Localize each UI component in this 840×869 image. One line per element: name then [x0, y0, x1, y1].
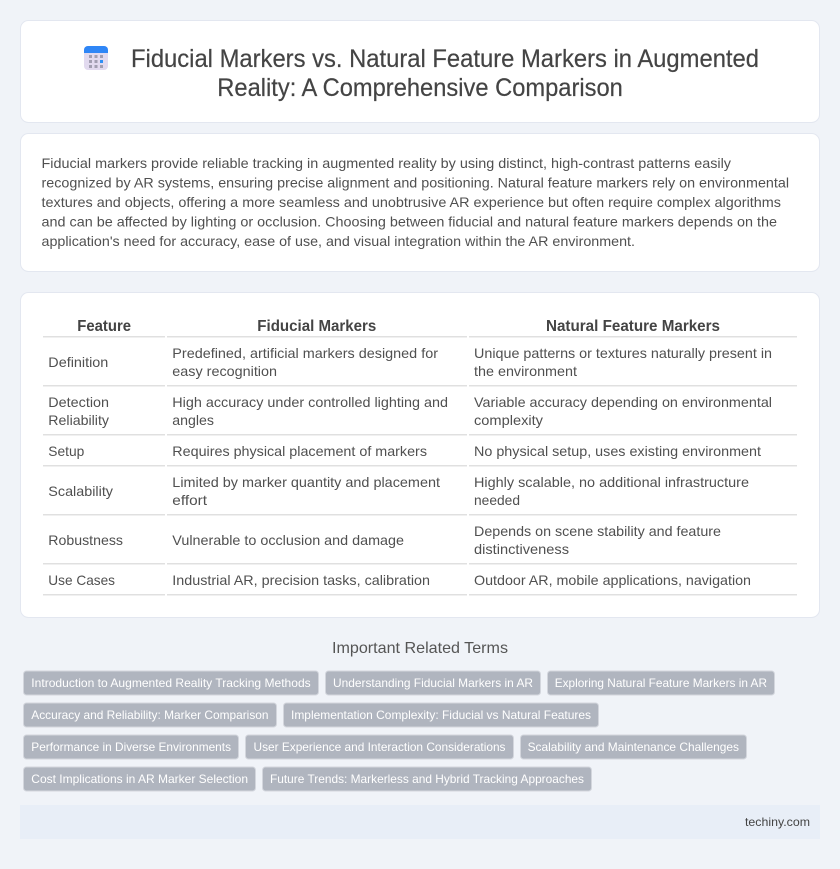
table row: scalability: Scalability: [48, 483, 113, 499]
text block: introduction: application's need for accuracy, ease of use, and visual integration within the AR environment.: [42, 233, 635, 249]
chip row 1: Introduction to Augmented Reality Tracking Methods: [31, 676, 311, 690]
chip row 1: Understanding Fiducial Markers in AR: [333, 676, 533, 690]
table row: setup: Requires physical placement of markers: [172, 443, 427, 459]
chip row 3: Performance in Diverse Environments: [31, 740, 231, 754]
chip row 3: [24, 735, 746, 759]
table row: scalability: effort: [172, 492, 207, 508]
table row: scalability: needed: [474, 492, 520, 508]
table row: scalability: [48, 474, 749, 508]
table row: robustness: distinctiveness: [474, 541, 569, 557]
table header row: [77, 318, 720, 335]
text block: introduction: [42, 155, 789, 249]
text block: introduction: and can be affected by lighting or occlusion. Choosing between fiducial and natural feature markers depends on the: [42, 214, 777, 230]
table row: detection reliability: angles: [172, 412, 214, 428]
panel: header: [20, 20, 820, 122]
table row: detection reliability: complexity: [474, 412, 543, 428]
table row: definition: Predefined, artificial markers designed for: [172, 345, 438, 361]
table row: use cases: Industrial AR, precision tasks, calibration: [172, 572, 430, 588]
chip row 4: Future Trends: Markerless and Hybrid Tracking Approaches: [270, 772, 584, 786]
table header row: Natural Feature Markers: [546, 318, 720, 335]
footer: [20, 805, 820, 839]
chip row 1: Exploring Natural Feature Markers in AR: [555, 676, 767, 690]
table row: scalability: Limited by marker quantity and placement: [172, 474, 440, 490]
chip row 3: User Experience and Interaction Considerations: [254, 740, 506, 754]
table row: robustness: Robustness: [48, 532, 123, 548]
table row: definition: Definition: [48, 354, 108, 370]
chip row 3: Scalability and Maintenance Challenges: [528, 740, 739, 754]
table row: robustness: Depends on scene stability and feature: [474, 523, 721, 539]
icon: calendar: [84, 46, 108, 70]
table row: detection reliability: Reliability: [48, 412, 109, 428]
panel: introduction: [20, 134, 820, 272]
table row: detection reliability: [48, 394, 772, 428]
table row: robustness: [48, 523, 721, 557]
chip row 4: [24, 767, 592, 791]
table row: setup: No physical setup, uses existing environment: [474, 443, 761, 459]
related term chips: [24, 671, 774, 791]
title: Reality: A Comprehensive Comparison: [217, 74, 623, 102]
table header row: Feature: [77, 318, 131, 335]
table row: setup: [48, 443, 761, 459]
table row: definition: [48, 345, 772, 379]
text block: introduction: Fiducial markers provide reliable tracking in augmented reality by using distinct, high-contrast patterns easily: [42, 155, 731, 171]
table row: detection reliability: Variable accuracy depending on environmental: [474, 394, 772, 410]
heading: important related terms: Important Related Terms: [332, 640, 508, 657]
table row: use cases: [48, 572, 751, 588]
table row: detection reliability: Detection: [48, 394, 109, 410]
table row: definition: Unique patterns or textures naturally present in: [474, 345, 772, 361]
table row: use cases: Outdoor AR, mobile applications, navigation: [474, 572, 751, 588]
footer source text: techiny.com: [745, 815, 810, 829]
table row: scalability: Highly scalable, no additional infrastructure: [474, 474, 749, 490]
table row: definition: the environment: [474, 363, 577, 379]
chip row 2: [24, 703, 598, 727]
chip row 4: Cost Implications in AR Marker Selection: [31, 772, 248, 786]
chip row 1: [24, 671, 774, 695]
title: [131, 45, 759, 102]
chip row 2: Accuracy and Reliability: Marker Comparison: [31, 708, 268, 722]
panel: comparison table: [20, 292, 820, 618]
table row: detection reliability: High accuracy under controlled lighting and: [172, 394, 448, 410]
table header row: Fiducial Markers: [257, 318, 376, 335]
table row: use cases: Use Cases: [48, 572, 115, 588]
text block: introduction: recognized by AR systems, ensuring precise alignment and positioning. Natural feature markers rely on environmental: [42, 174, 789, 190]
chip row 2: Implementation Complexity: Fiducial vs Natural Features: [291, 708, 591, 722]
text block: introduction: textures and objects, offering a more seamless and unobtrusive AR experience but often require complex algorithms: [42, 194, 781, 210]
table row: definition: easy recognition: [172, 363, 277, 379]
title: Fiducial Markers vs. Natural Feature Markers in Augmented: [131, 45, 759, 73]
table row: robustness: Vulnerable to occlusion and damage: [172, 532, 404, 548]
table row: setup: Setup: [48, 443, 85, 459]
